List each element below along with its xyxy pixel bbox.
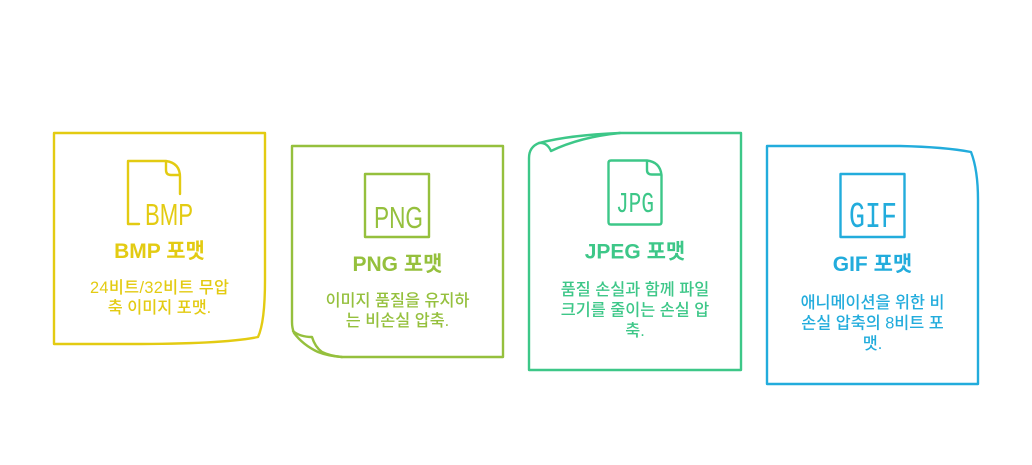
panel: BMP format xyxy=(54,133,265,344)
icon: JPG file: JPG xyxy=(616,188,654,221)
description: JPEG: 품질 손실과 함께 파일 xyxy=(561,281,709,299)
heading: PNG: PNG 포맷 xyxy=(353,253,442,276)
icon: JPG file xyxy=(608,160,662,224)
card outline: GIF xyxy=(767,146,978,384)
heading: GIF: GIF 포맷 xyxy=(833,253,912,276)
page curl: JPEG xyxy=(539,133,620,151)
icon: PNG file: PNG xyxy=(374,200,423,235)
icon: GIF file xyxy=(840,174,904,238)
icon: BMP file xyxy=(128,161,193,232)
description: JPEG: 크기를 줄이는 손실 압 xyxy=(561,302,709,320)
description: BMP: 축 이미지 포맷. xyxy=(108,299,211,317)
card outline: PNG xyxy=(292,146,503,357)
icon: BMP file: BMP xyxy=(145,197,193,232)
description: PNG: 이미지 품질을 유지하 xyxy=(326,292,469,310)
icon: PNG file xyxy=(365,174,429,237)
description: JPEG: 축. xyxy=(625,322,645,340)
card outline: JPEG xyxy=(529,133,741,370)
card outline: BMP xyxy=(54,133,265,344)
heading: BMP: BMP 포맷 xyxy=(114,240,205,263)
description: PNG: 는 비손실 압축. xyxy=(346,312,449,330)
page curl: PNG xyxy=(293,331,342,357)
panel: JPEG format xyxy=(529,133,741,370)
description: GIF: 손실 압축의 8비트 포 xyxy=(801,314,944,332)
heading: JPEG: JPEG 포맷 xyxy=(585,240,685,264)
description: GIF: 맷. xyxy=(863,335,882,353)
icon: GIF file: GIF xyxy=(849,197,897,238)
panel: PNG format xyxy=(292,146,503,357)
description: GIF: 애니메이션을 위한 비 xyxy=(801,294,944,312)
panel: GIF format xyxy=(767,146,978,384)
description: BMP: 24비트/32비트 무압 xyxy=(90,279,229,297)
